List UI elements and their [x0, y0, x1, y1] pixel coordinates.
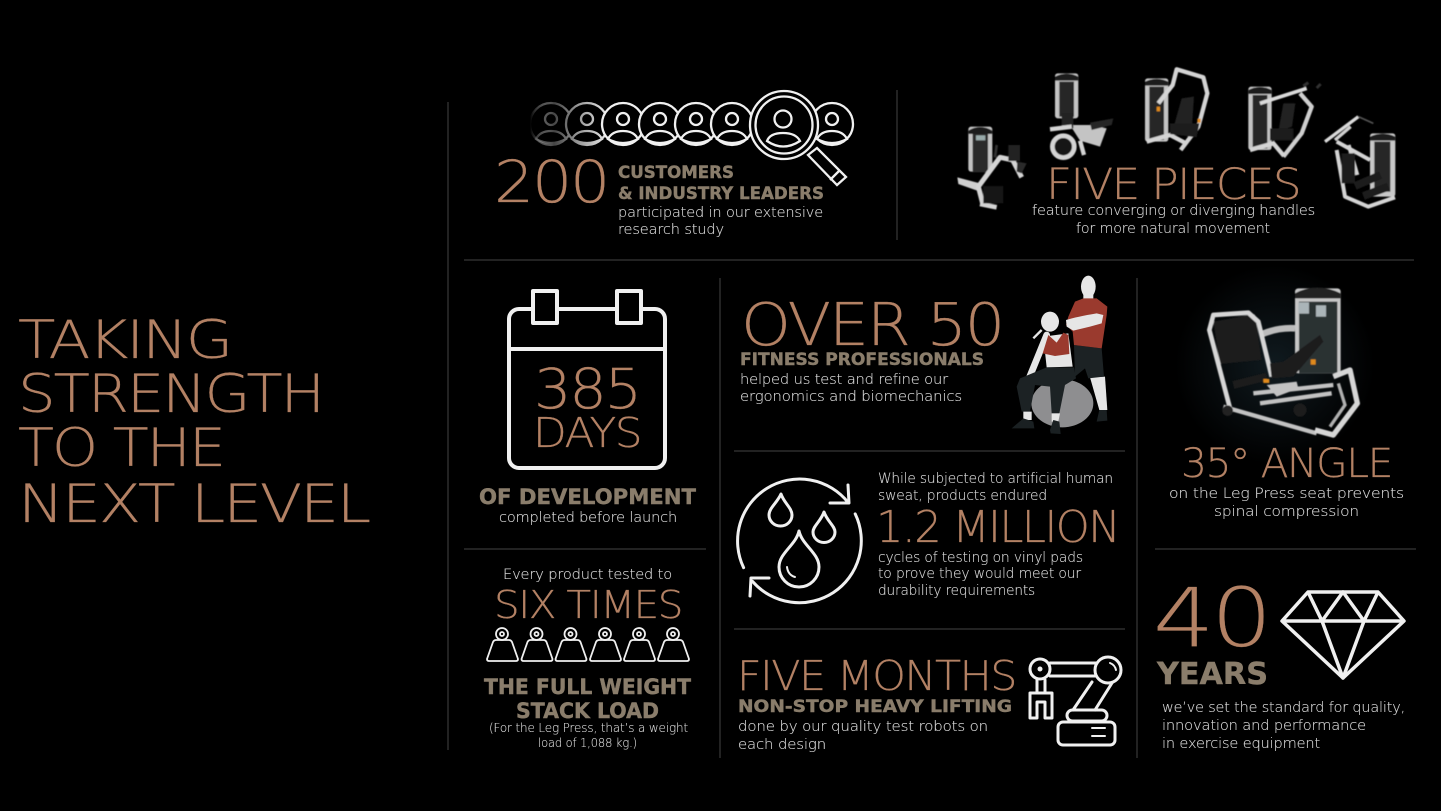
panel: 40 years: [1153, 572, 1405, 752]
heading: heavy lifting: NON-STOP HEAVY LIFTING: [738, 697, 1012, 717]
heading: full weight stack: [484, 675, 692, 723]
text: research study: [618, 205, 823, 238]
panel: five months: [737, 652, 1121, 753]
title: [18, 310, 369, 535]
stat label: days: DAYS: [533, 409, 641, 457]
icon: people under magnifying glass: [530, 91, 853, 185]
icon: calendar: [509, 291, 665, 468]
text: research study: research study: [618, 222, 724, 238]
text: every product: Every product tested to: [503, 567, 672, 583]
heading: full weight stack: THE FULL WEIGHT: [484, 675, 692, 699]
title: NEXT LEVEL: [18, 474, 369, 535]
stat: 35 degree angle: 35° ANGLE: [1181, 441, 1392, 487]
text: before launch: completed before launch: [499, 510, 677, 526]
heading: full weight stack: STACK LOAD: [516, 699, 659, 723]
text: leg press load: [489, 720, 688, 750]
text: spinal compression: spinal compression: [1214, 504, 1359, 520]
panel: over 50: [740, 276, 1107, 434]
icon: robot arm: [1030, 657, 1121, 745]
text: handles: [1032, 203, 1315, 237]
title: TAKING: [18, 310, 231, 371]
stat: 1.2 million: 1.2 MILLION: [876, 502, 1119, 553]
title: TO THE: [18, 418, 224, 479]
panel: customers: [494, 91, 853, 238]
image: trainers with exercise ball: [1012, 276, 1107, 434]
panel: five pieces: [957, 69, 1395, 237]
panel: 1.2 million: [738, 471, 1119, 603]
text: leg press load: (For the Leg Press, that’s a weight: [489, 720, 688, 735]
text: cycles of testing: [878, 550, 1083, 599]
heading: customers: & INDUSTRY LEADERS: [618, 184, 824, 204]
panel: 385 days: [479, 291, 697, 526]
text: test robots: [738, 719, 988, 753]
panel: six times: [484, 567, 692, 750]
text: research study: participated in our extensive: [618, 205, 823, 221]
text: standard for quality: in exercise equipment: [1162, 736, 1320, 752]
icon: sweat drops cycle: [738, 479, 861, 603]
stat: over 50: OVER 50: [741, 290, 1003, 359]
icon: diamond: [1282, 592, 1404, 678]
heading: years: YEARS: [1156, 657, 1268, 692]
image: leg press machine: [1175, 265, 1375, 465]
text: test robots: each design: [738, 737, 826, 753]
text: spinal compression: on the Leg Press seat prevents: [1169, 486, 1404, 502]
panel: 35 degree angle: [1169, 265, 1404, 520]
text: test robots: done by our quality test robots on: [738, 719, 988, 735]
heading: of development: OF DEVELOPMENT: [479, 485, 697, 509]
text: standard for quality: we’ve set the standard for quality,: [1162, 700, 1405, 716]
text: cycles of testing: to prove they would meet our: [878, 566, 1081, 582]
heading: six times: SIX TIMES: [494, 583, 682, 627]
text: leg press load: load of 1,088 kg.): [538, 735, 637, 750]
text: standard for quality: innovation and performance: [1162, 718, 1366, 734]
image: five machines: [957, 69, 1395, 207]
text: ergonomics: ergonomics and biomechanics: [740, 389, 962, 405]
heading: fitness professionals: FITNESS PROFESSIONALS: [740, 350, 984, 370]
text: subjected to sweat: [878, 471, 1113, 504]
title: STRENGTH: [18, 364, 323, 425]
stat: 40: 40: [1153, 572, 1269, 666]
stat: 385: 385: [534, 357, 640, 421]
text: subjected to sweat: sweat, products endured: [878, 488, 1047, 504]
heading: customers: [618, 163, 824, 204]
text: ergonomics: [740, 372, 962, 405]
text: cycles of testing: cycles of testing on vinyl pads: [878, 550, 1083, 566]
heading: five months: FIVE MONTHS: [737, 652, 1016, 700]
heading: five pieces: FIVE PIECES: [1046, 160, 1300, 210]
icon: six weights: [487, 628, 689, 661]
text: subjected to sweat: While subjected to artificial human: [878, 471, 1113, 487]
heading: customers: CUSTOMERS: [618, 163, 734, 183]
text: handles: for more natural movement: [1076, 221, 1270, 237]
text: ergonomics: helped us test and refine our: [740, 372, 948, 388]
text: cycles of testing: durability requirements: [878, 583, 1035, 599]
text: spinal compression: [1169, 486, 1404, 520]
stat: 200: 200: [494, 148, 608, 216]
text: standard for quality: [1162, 700, 1405, 752]
text: handles: feature converging or diverging handles: [1032, 203, 1315, 219]
